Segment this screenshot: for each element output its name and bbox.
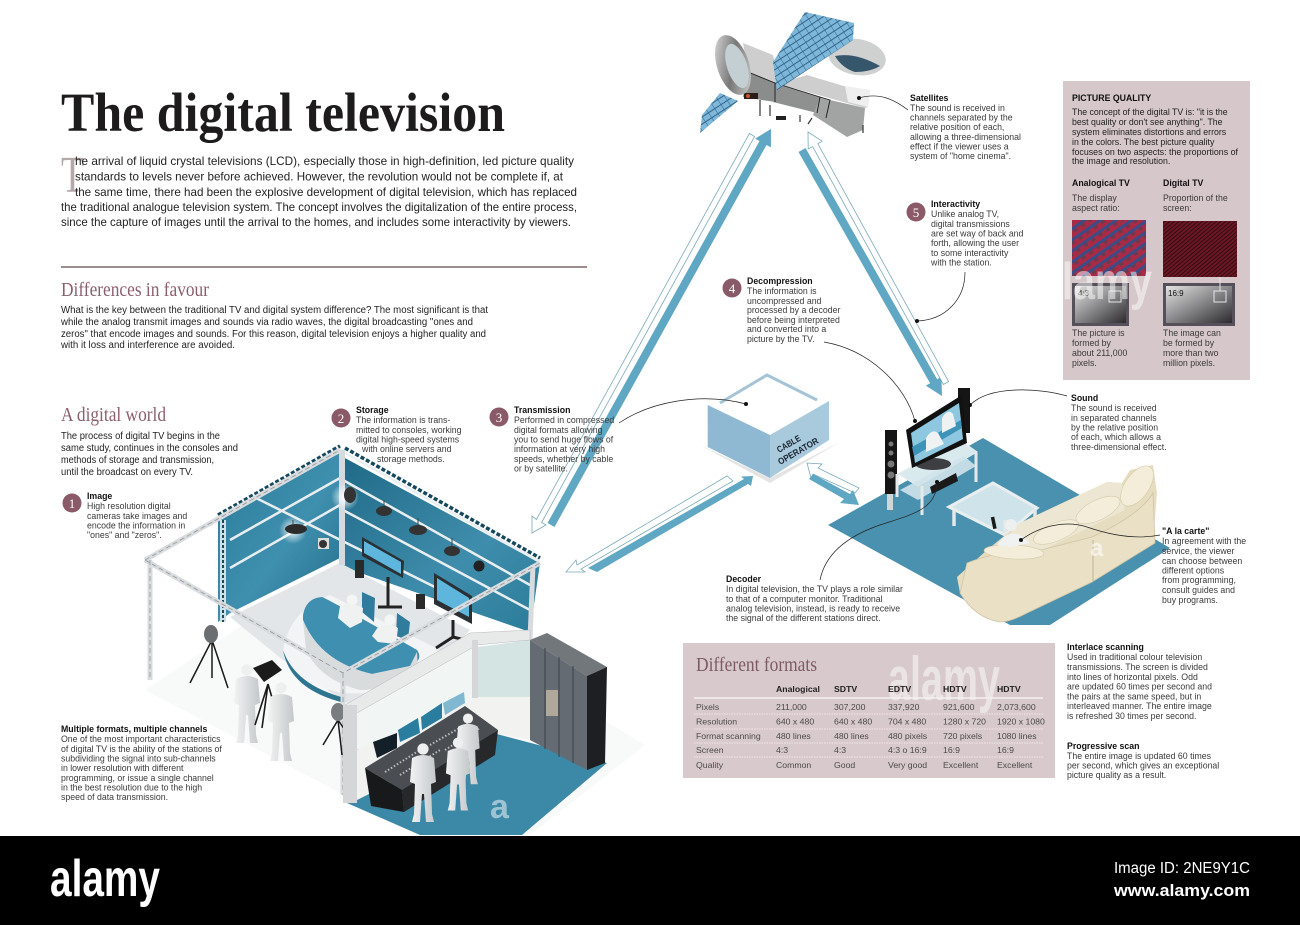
- operator standing: [446, 737, 470, 811]
- number 4: 4: [729, 281, 736, 296]
- step 2: storage: digital high-speed systems: [356, 434, 460, 444]
- panel: different formats: [683, 643, 1055, 778]
- row: format scanning: 1080 lines: [997, 731, 1037, 741]
- multiple formats text: speed of data transmission.: [61, 792, 168, 802]
- table header: Analogical: [776, 684, 820, 694]
- row: format scanning: 480 lines: [776, 731, 811, 741]
- analogical column: formed by: [1072, 338, 1112, 348]
- row: screen: 4:3 o 16:9: [888, 745, 927, 755]
- progressive scan text: picture quality as a result.: [1067, 770, 1166, 780]
- left face: [708, 405, 770, 478]
- section: differences in favour: with it loss and interference are avoided.: [60, 340, 235, 351]
- step 5: interactivity: Interactivity: [931, 199, 980, 209]
- set floor: [230, 563, 470, 705]
- tripod camera front: [323, 703, 360, 755]
- arrow down to home: [798, 148, 942, 396]
- truss frame: [145, 450, 540, 795]
- panel intro: system eliminates distortions and errors: [1072, 127, 1227, 137]
- analog screen: [1072, 283, 1129, 326]
- leader: sound: [968, 390, 1067, 407]
- section: a digital world: [61, 404, 238, 478]
- section: differences in favour: [60, 279, 488, 351]
- step 2: storage: The information is trans-: [356, 415, 450, 425]
- step 1: image: [62, 491, 187, 540]
- number 2: 2: [338, 411, 344, 426]
- row: resolution: Resolution: [696, 716, 737, 726]
- section: a digital world: until the broadcast on every TV.: [61, 467, 193, 478]
- interlace scanning text: is refreshed 30 times per second.: [1067, 711, 1196, 721]
- box shadow: [700, 442, 840, 483]
- satellites text: relative position of each,: [910, 122, 1004, 132]
- progressive scan text: per second, which gives an exceptional: [1067, 760, 1219, 770]
- row: format scanning: 480 lines: [834, 731, 869, 741]
- satellites text: allowing a three-dimensional: [910, 132, 1021, 142]
- multiple formats text: programming, or issue a single channel: [61, 773, 214, 783]
- panel heading: PICTURE QUALITY: [1072, 93, 1151, 103]
- cushions: [984, 460, 1160, 561]
- step 5: interactivity: with the station.: [930, 258, 992, 268]
- studio lights: [279, 483, 484, 609]
- step 3: transmission: digital formats allowing: [514, 425, 603, 435]
- step 4: decompression: [722, 276, 840, 344]
- row: resolution: 1280 x 720: [943, 716, 986, 726]
- table header: SDTV: [834, 684, 857, 694]
- studio camera: [253, 660, 282, 728]
- arrow up from home: [808, 132, 949, 384]
- step 2: storage: with online servers and: [361, 444, 452, 454]
- row: resolution: 640 x 480: [776, 716, 814, 726]
- row: pixels: 2,073,600: [997, 702, 1036, 712]
- control monitors: [373, 692, 465, 758]
- row: resolution: [696, 716, 1045, 726]
- wall monitor 1: [362, 537, 404, 578]
- analogical column: Analogical TV: [1072, 178, 1130, 188]
- section: differences in favour: What is the key between the traditional TV and digital system difference? The most significant is that: [61, 305, 488, 316]
- image id: Image ID: 2NE9Y1C: [1114, 860, 1250, 877]
- panel intro: best quality or don't see anything". The: [1072, 117, 1223, 127]
- coffee table: [949, 483, 1037, 535]
- leader: interactivity: [915, 272, 965, 323]
- section: a digital world: The process of digital TV begins in the: [61, 431, 220, 442]
- row: quality: Excellent: [943, 760, 979, 770]
- interlace scanning text: interleaved manner. The entire image: [1067, 701, 1212, 711]
- step 4: decompression: picture by the TV.: [747, 334, 815, 344]
- analogical column: about 211,000: [1072, 348, 1127, 358]
- multiple formats text: Multiple formats, multiple channels: [61, 724, 207, 734]
- step 1: image: Image: [87, 491, 112, 501]
- heading: Differences in favour: [61, 279, 209, 301]
- row: quality: Common: [776, 760, 811, 770]
- analogical column: The display: [1072, 193, 1117, 203]
- drop cap T: T: [61, 147, 84, 204]
- section: a digital world: same study, continues in the consoles and: [61, 443, 238, 454]
- step 4: decompression: uncompressed and: [747, 296, 822, 306]
- row: resolution: 1920 x 1080: [997, 716, 1045, 726]
- step 3: transmission: Performed in compressed: [514, 415, 614, 425]
- sofa seat back: [1000, 482, 1125, 555]
- row: screen: 16:9: [997, 745, 1014, 755]
- decoder text: the signal of the different stations direct.: [726, 613, 881, 623]
- leader: decompression: [824, 342, 917, 423]
- satellites text: Satellites: [910, 93, 949, 103]
- number 3: 3: [496, 410, 502, 425]
- panel intro: The concept of the digital TV is: "it is the: [1072, 107, 1228, 117]
- rear block: [813, 97, 865, 137]
- interlace scanning text: Used in traditional colour television: [1067, 652, 1202, 662]
- row: pixels: 921,600: [943, 702, 975, 712]
- row: format scanning: 480 pixels: [888, 731, 928, 741]
- satellites text: effect if the viewer uses a: [910, 142, 1009, 152]
- illustration: TV studio: [145, 446, 645, 835]
- row: quality: Good: [834, 760, 855, 770]
- panel intro: in the colors. The best picture quality: [1072, 137, 1215, 147]
- multiple formats text: One of the most important characteristics: [61, 734, 221, 744]
- heading: A digital world: [61, 404, 166, 426]
- digital column: million pixels.: [1163, 358, 1215, 368]
- box label: CABLE: [775, 433, 803, 455]
- step 5: interactivity: to some interactivity: [931, 248, 1009, 258]
- multiple formats text: in the best resolution due to the high: [61, 782, 202, 792]
- anchor chairs: [362, 592, 410, 640]
- table header: HDTV: [943, 684, 967, 694]
- analogical column: aspect ratio:: [1072, 203, 1120, 213]
- watermark: a: [1090, 535, 1104, 562]
- satellites text: system of "home cinema".: [910, 151, 1011, 161]
- satellites text: The sound is received in: [910, 103, 1005, 113]
- analogical column: pixels.: [1072, 358, 1097, 368]
- number 1: 1: [69, 496, 75, 511]
- control room floor: [347, 733, 607, 835]
- row: quality: Very good: [888, 760, 927, 770]
- analog screen: 4:3: [1078, 289, 1090, 298]
- news desk: [303, 597, 419, 674]
- row: pixels: 337,920: [888, 702, 920, 712]
- interlace scanning text: are updated 60 times per second and: [1067, 682, 1212, 692]
- sound text: by the relative position: [1071, 422, 1158, 432]
- step 2: storage: storage methods.: [377, 454, 445, 464]
- interlace scanning text: Interlace scanning: [1067, 642, 1144, 652]
- step 1: image: "ones" and "zeros".: [87, 530, 162, 540]
- interlace scanning text: transmissions. The screen is divided: [1067, 662, 1208, 672]
- a la carte text: service, the viewer: [1162, 546, 1235, 556]
- illustration: living room: [828, 388, 1170, 625]
- digital column: Proportion of the: [1163, 193, 1228, 203]
- a la carte text: consult guides and: [1162, 585, 1235, 595]
- analog pixel pattern: [1072, 220, 1146, 276]
- leader: decoder: [820, 480, 939, 580]
- row: resolution: 704 x 480: [888, 716, 926, 726]
- lower solar panel: [700, 93, 738, 133]
- watermark: lamy: [1062, 253, 1152, 311]
- row: pixels: Pixels: [696, 702, 720, 712]
- control console: [365, 706, 498, 812]
- row: pixels: 307,200: [834, 702, 866, 712]
- tripod camera back: [190, 625, 228, 688]
- row: pixels: 211,000: [776, 702, 807, 712]
- server rack: [530, 633, 607, 770]
- website: www.alamy.com: [1113, 882, 1250, 900]
- blue carpet: [828, 438, 1170, 625]
- a la carte text: can choose between: [1162, 556, 1242, 566]
- right back wall: [343, 457, 540, 632]
- step 3: transmission: Transmission: [514, 405, 570, 415]
- row: format scanning: Format scanning: [696, 731, 761, 741]
- sofa silhouette: [957, 465, 1157, 622]
- illustration: satellite: [700, 12, 889, 137]
- a la carte text: In agreement with the: [1162, 536, 1246, 546]
- step 3: transmission: [490, 405, 614, 474]
- right speaker: [958, 388, 970, 433]
- back edges: [720, 375, 817, 403]
- illustration: cable operator box: [700, 375, 840, 483]
- upper solar panel: [773, 12, 854, 90]
- row: screen: 4:3: [776, 745, 788, 755]
- sound text: The sound is received: [1071, 403, 1157, 413]
- panel: picture quality: [1062, 81, 1250, 380]
- progressive scan text: Progressive scan: [1067, 741, 1139, 751]
- footer logo: alamy: [50, 850, 160, 908]
- row: screen: Screen: [696, 745, 724, 755]
- intro paragraph: he arrival of liquid crystal televisions (LCD), especially those in high-definition, led picture quality: [75, 154, 574, 168]
- row: resolution: 640 x 480: [834, 716, 872, 726]
- television: [906, 395, 967, 470]
- left speaker: [885, 430, 897, 510]
- satellites text: channels separated by the: [910, 112, 1013, 122]
- white block: [845, 86, 870, 107]
- step 4: decompression: before being interpreted: [747, 315, 840, 325]
- anchor left: [338, 594, 363, 628]
- monitor stand: [378, 577, 465, 648]
- step 2: storage: Storage: [356, 405, 389, 415]
- step 4: decompression: and converted into a: [747, 324, 826, 334]
- step 5: interactivity: forth, allowing the user: [931, 238, 1019, 248]
- leader: transmission: [619, 399, 748, 423]
- arrows: studio and satellite: [532, 129, 949, 572]
- intro paragraph: since the capture of images until the arrival to the homes, and includes some interactivity by viewers.: [61, 215, 571, 229]
- arrow studio to cable: [588, 476, 753, 572]
- truss posts: [223, 450, 342, 622]
- row: pixels: [696, 702, 1036, 712]
- wall rails: [218, 450, 540, 610]
- panel intro: the image and resolution.: [1072, 156, 1170, 166]
- watermark: a: [490, 788, 510, 826]
- panel heading: Different formats: [696, 654, 817, 676]
- right face: [770, 401, 829, 478]
- step 1: image: High resolution digital: [87, 501, 171, 511]
- sofa outer face: [960, 493, 1155, 622]
- sound text: of each, which allows a: [1071, 432, 1161, 442]
- step 3: transmission: you to send huge flows of: [514, 434, 614, 444]
- step 1: image: cameras take images and: [87, 511, 187, 521]
- arrow home to cable: [807, 463, 859, 493]
- step 2: storage: mitted to consoles, working: [356, 425, 462, 435]
- step 5: interactivity: digital transmissions: [931, 219, 1010, 229]
- sound text: in separated channels: [1071, 413, 1157, 423]
- viewer: [991, 517, 1030, 547]
- analogical column: The picture is: [1072, 328, 1125, 338]
- wall monitor 2: [434, 573, 472, 624]
- title: The digital television: [61, 82, 505, 143]
- front dish: [708, 31, 758, 99]
- decoder text: analog television, instead, is ready to receive: [726, 604, 900, 614]
- cameraman 1: [234, 664, 260, 743]
- step 3: transmission: or by satellite.: [514, 464, 568, 474]
- glass stand: [897, 440, 977, 515]
- row: format scanning: 720 pixels: [943, 731, 983, 741]
- row: format scanning: [696, 731, 1037, 741]
- row: screen: 4:3: [834, 745, 846, 755]
- interlace scanning text: into lines of horizontal pixels. Odd: [1067, 672, 1198, 682]
- curved platform: [283, 595, 470, 693]
- step 4: decompression: The information is: [747, 286, 817, 296]
- light upper casing: [743, 43, 870, 108]
- section: differences in favour: zeros" that encode images and sounds. For this reason, digital television enjoys a higher quality and: [61, 329, 486, 340]
- arrow cable to home: [809, 474, 859, 505]
- digital screen: 16:9: [1168, 289, 1184, 298]
- studio floor: [145, 560, 645, 835]
- decoder text: to that of a computer monitor. Traditional: [726, 594, 883, 604]
- section: a digital world: methods of storage and transmission,: [61, 455, 214, 466]
- table header: HDTV: [997, 684, 1021, 694]
- decoder text: In digital television, the TV plays a role similar: [726, 584, 903, 594]
- anchor right: [372, 614, 398, 644]
- step 4: decompression: Decompression: [747, 276, 813, 286]
- intro paragraph: standards to levels never before achieved. However, the revolution would not be complete if, at: [75, 170, 564, 184]
- sound text: three-dimensional effect.: [1071, 442, 1167, 452]
- left back wall: [218, 453, 340, 622]
- operator seated: [410, 743, 436, 822]
- step 3: transmission: information at very high: [514, 444, 605, 454]
- intro paragraph: the same time, there had been the explosive development of digital television, which has replaced: [75, 185, 577, 199]
- step 5: interactivity: [906, 199, 1024, 268]
- watermark: alamy: [888, 645, 1000, 714]
- arrow up to satellite: [548, 129, 771, 527]
- sound text: Sound: [1071, 393, 1098, 403]
- analogical column: [1072, 178, 1146, 368]
- intro paragraph: the traditional analogue television system. The concept involves the digitalization of the entire process,: [61, 200, 577, 214]
- dish antenna right: [825, 34, 889, 80]
- step 5: interactivity: are set way of back and: [931, 228, 1024, 238]
- arrow cable to studio: [566, 476, 733, 572]
- arrow down to studio: [532, 134, 755, 533]
- section: differences in favour: while the analog transmit images and sounds via radio waves, the digital broadcasting "ones and: [60, 317, 473, 328]
- back truss: [218, 446, 540, 558]
- interlace scanning text: the pairs at the same speed, but in: [1067, 692, 1201, 702]
- digital pixel pattern: [1163, 221, 1237, 277]
- digital column: [1163, 178, 1237, 368]
- decoder text: Decoder: [726, 574, 762, 584]
- digital screen: [1163, 277, 1235, 326]
- row: quality: Excellent: [997, 760, 1033, 770]
- row: screen: [696, 745, 1014, 755]
- step 5: interactivity: Unlike analog TV,: [931, 209, 999, 219]
- a la carte text: from programming,: [1162, 575, 1236, 585]
- footer band: [0, 836, 1300, 925]
- partition wall: [343, 630, 530, 803]
- row: screen: 16:9: [943, 745, 960, 755]
- operator right: [456, 713, 480, 784]
- leader: a la carte: [1019, 524, 1160, 542]
- progressive scan text: The entire image is updated 60 times: [1067, 751, 1212, 761]
- a la carte text: "A la carte": [1162, 526, 1209, 536]
- a la carte text: buy programs.: [1162, 595, 1218, 605]
- digital column: The image can: [1163, 328, 1221, 338]
- sofa: [957, 460, 1160, 622]
- table header: [776, 684, 1021, 694]
- row: quality: [696, 760, 1033, 770]
- digital column: screen:: [1163, 203, 1192, 213]
- cameraman 2: [268, 682, 294, 761]
- satellite body: [743, 43, 870, 137]
- row: quality: Quality: [696, 760, 724, 770]
- digital column: Digital TV: [1163, 178, 1204, 188]
- step 2: storage: [332, 405, 462, 464]
- multiple formats text: in lower resolution with different: [61, 763, 184, 773]
- step 4: decompression: processed by a decoder: [747, 305, 840, 315]
- satellites text: [857, 93, 1021, 161]
- intro paragraph: [61, 147, 577, 229]
- multiple formats text: subdividing the signal into sub-channels: [61, 754, 216, 764]
- step 3: transmission: speeds, whether by cable: [514, 454, 613, 464]
- multiple formats text: of digital TV is the ability of the stations of: [61, 744, 222, 754]
- box label: OPERATOR: [776, 435, 821, 467]
- table header: EDTV: [888, 684, 911, 694]
- digital column: more than two: [1163, 348, 1219, 358]
- step 1: image: encode the information in: [87, 520, 185, 530]
- number 5: 5: [913, 205, 919, 220]
- panel intro: focuses on two aspects: the proportions of: [1072, 147, 1239, 157]
- digital column: be formed by: [1163, 338, 1215, 348]
- a la carte text: different options: [1162, 566, 1225, 576]
- side panels: [743, 72, 775, 102]
